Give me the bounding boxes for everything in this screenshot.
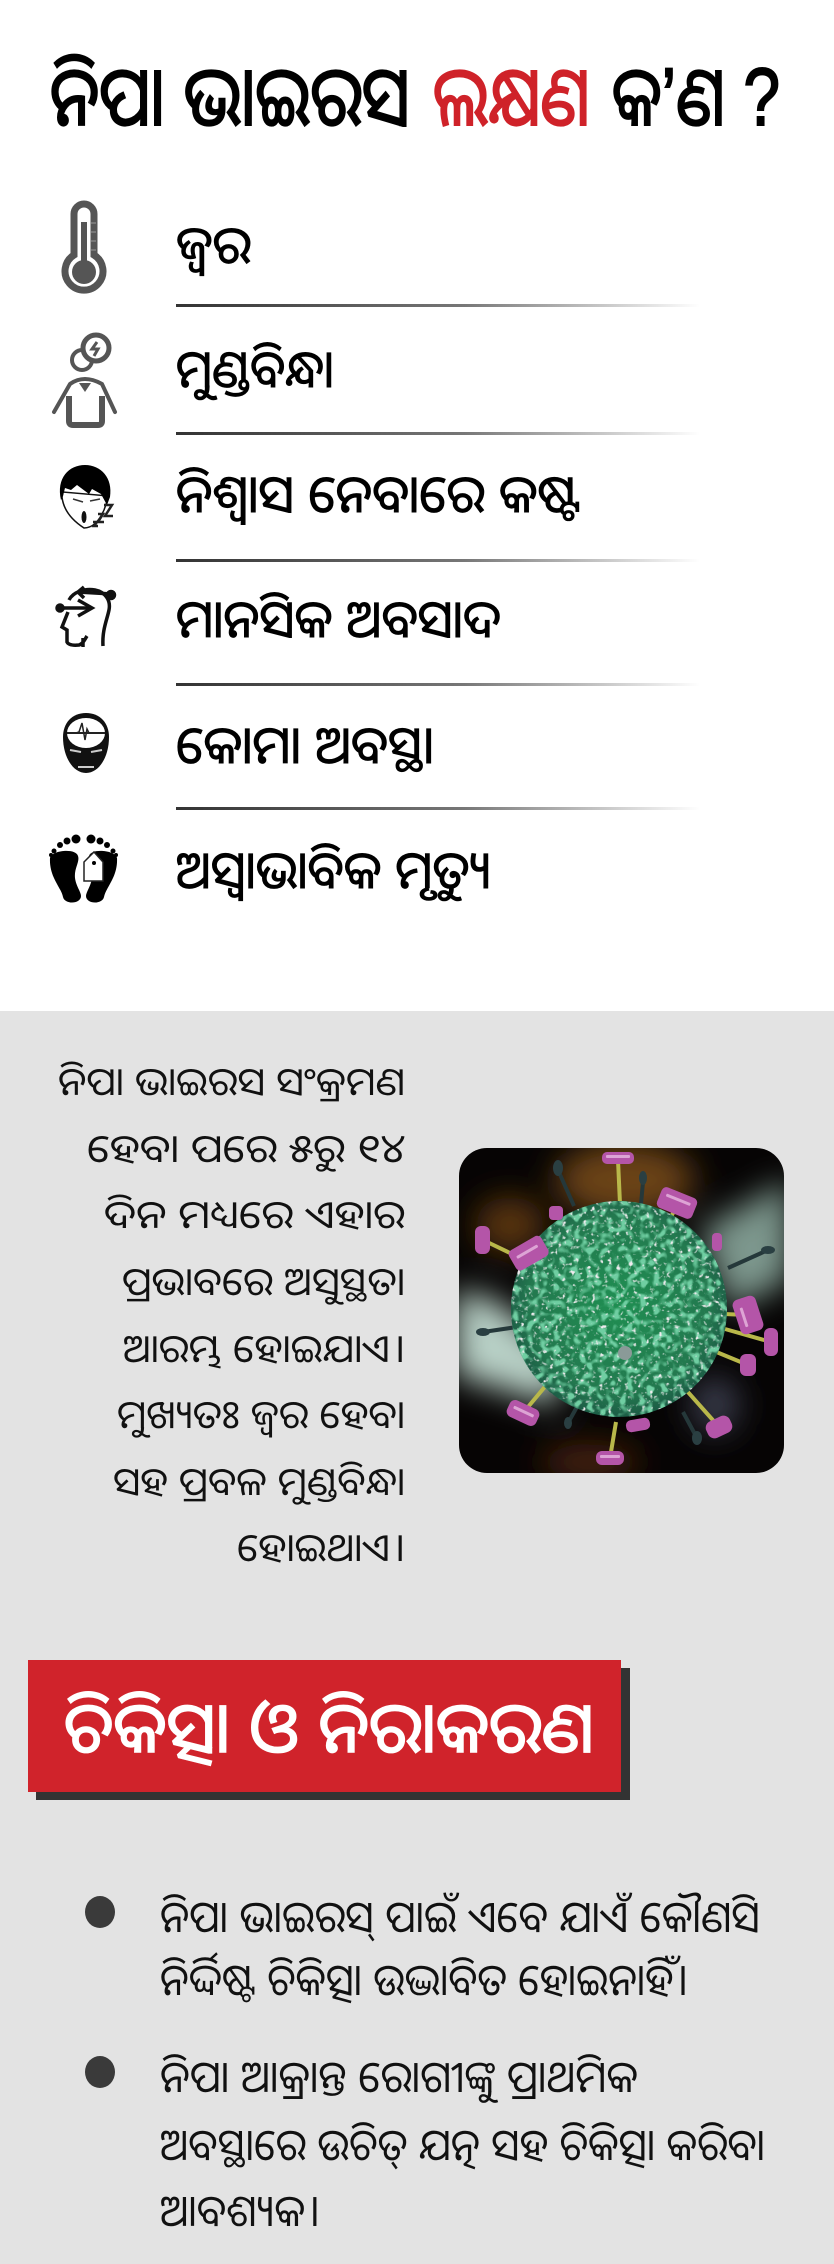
text block: incubation paragraph: ସହ ପ୍ରବଳ ମୁଣ୍ଡବିନ୍ଧା	[113, 1461, 405, 1505]
text block: incubation paragraph: ପ୍ରଭାବରେ ଅସୁସ୍ଥତା	[122, 1261, 405, 1305]
text block: incubation paragraph: ଆରମ୍ଭ ହୋଇଯାଏ ।	[123, 1328, 405, 1371]
heading: treatment and prevention	[28, 1660, 630, 1800]
divider	[176, 807, 700, 810]
bullet: no specific treatment: ନିପା ଭାଇରସ୍ ପାଇଁ ଏବେ ଯାଏଁ କୌଣସି	[160, 1892, 760, 1942]
bullet: early care	[85, 2053, 765, 2236]
virus dark stalks	[483, 1170, 768, 1438]
virus surface texture	[510, 1200, 730, 1420]
title: ଲକ୍ଷଣ	[433, 52, 590, 143]
icon: headache person	[54, 335, 115, 425]
divider	[176, 683, 700, 686]
text block: incubation paragraph: ହେବା ପରେ ୫ରୁ ୧୪	[87, 1128, 405, 1172]
text block: incubation paragraph: ମୁଖ୍ୟତଃ ଜ୍ୱର ହେବା	[117, 1394, 405, 1438]
symptom text: headache: ମୁଣ୍ଡବିନ୍ଧା	[176, 341, 334, 400]
virus dark stalk tips	[476, 1160, 775, 1445]
image: virus illustration	[455, 1142, 790, 1480]
panel: grey background	[0, 1011, 834, 2264]
icon: coma face	[63, 713, 109, 773]
symptom text: mental depression: ମାନସିକ ଅବସାଦ	[176, 591, 501, 649]
symptom text: coma: କୋମା ଅବସ୍ଥା	[176, 717, 434, 775]
icon: feet with tag	[49, 834, 118, 903]
virus caps	[475, 1152, 778, 1465]
text block: incubation paragraph: ଦିନ ମଧ୍ୟରେ ଏହାର	[104, 1194, 405, 1237]
symptom text: abnormal death: ଅସ୍ୱାଭାବିକ ମୃତ୍ୟୁ	[176, 842, 491, 901]
bullet: no specific treatment: ନିର୍ଦ୍ଦିଷ୍ଟ ଚିକିତ୍ସା ଉଦ୍ଭାବିତ ହୋଇନାହିଁ।	[160, 1952, 688, 2005]
virus cap highlights	[513, 1155, 749, 1458]
bullet: no specific treatment	[85, 1892, 760, 2005]
bullet: early care: ଆବଶ୍ୟକ।	[160, 2187, 320, 2236]
bullet: early care: ଅବସ୍ଥାରେ ଉଚିତ୍ ଯତ୍ନ ସହ ଚିକିତ୍ସା କରିବା	[160, 2121, 765, 2170]
symptom text: difficulty breathing: ନିଶ୍ୱାସ ନେବାରେ କଷ୍ଟ	[176, 466, 581, 525]
divider	[176, 559, 700, 562]
text block: incubation paragraph: ହୋଇଥାଏ।	[237, 1527, 405, 1570]
icon: head with arrows	[57, 587, 114, 647]
title: ନିପା ଭାଇରସ	[50, 52, 410, 143]
text block: incubation paragraph	[58, 1061, 405, 1570]
icon: thermometer	[65, 204, 103, 290]
symptom text: fever: ଜ୍ୱର	[176, 217, 251, 276]
text block: incubation paragraph: ନିପା ଭାଇରସ ସଂକ୍ରମଣ	[58, 1061, 405, 1104]
panel: symptoms list	[49, 204, 700, 903]
divider	[176, 304, 700, 307]
virus sphere	[511, 1201, 727, 1417]
bullet: early care: ନିପା ଆକ୍ରାନ୍ତ ରୋଗୀଙ୍କୁ ପ୍ରାଥମିକ	[160, 2053, 638, 2103]
title	[50, 52, 780, 143]
title: କ’ଣ ?	[612, 52, 780, 143]
divider	[176, 432, 700, 435]
heading: treatment and prevention: ଚିକିତ୍ସା ଓ ନିରାକରଣ	[64, 1689, 594, 1767]
virus stalks	[483, 1160, 771, 1458]
icon: breathing difficulty face	[60, 465, 113, 528]
